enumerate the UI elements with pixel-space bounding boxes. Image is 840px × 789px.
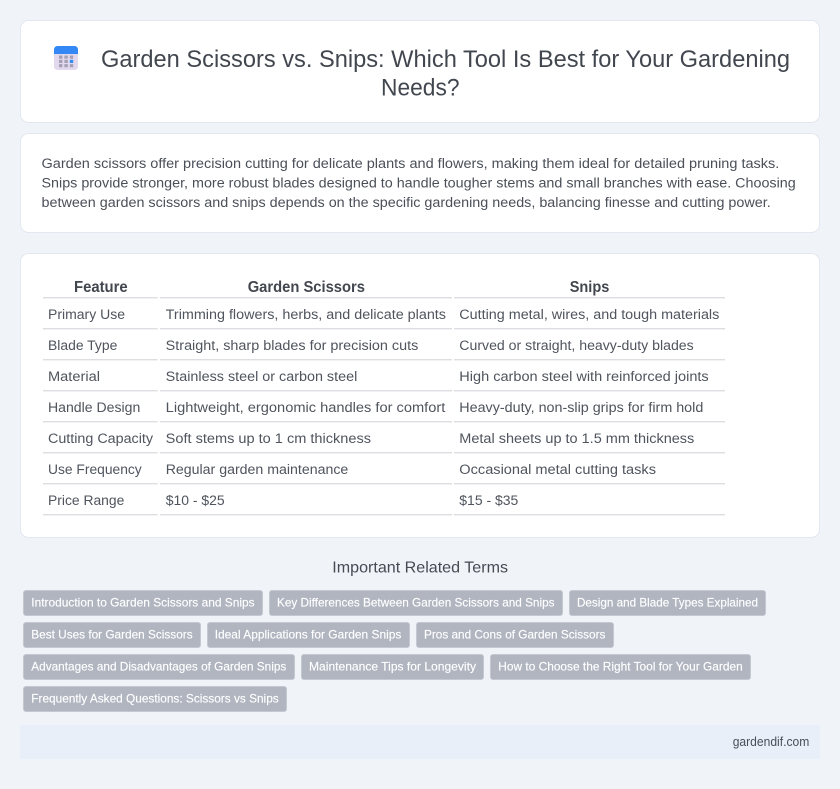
table row: use frequency: Occasional metal cutting tasks: [459, 462, 656, 478]
table row: handle design: [43, 400, 725, 422]
table row: price range: $15 - $35: [459, 493, 518, 509]
panel: comparison table: [20, 254, 820, 538]
table header row: [43, 279, 725, 298]
tag: [270, 590, 562, 616]
table row: use frequency: [43, 462, 725, 484]
panel: title header: [20, 20, 820, 122]
tag: [490, 654, 750, 680]
tag: Advantages and Disadvantages of Garden Snips: [31, 660, 286, 674]
table row: handle design: Lightweight, ergonomic handles for comfort: [166, 400, 445, 416]
table header row: Garden Scissors: [248, 279, 365, 296]
heading: important related terms: Important Related Terms: [332, 560, 508, 577]
table row: material: [43, 369, 725, 391]
table row: primary use: Primary Use: [48, 307, 125, 323]
title: [101, 46, 790, 102]
tag: [24, 686, 286, 712]
table row: handle design: Heavy-duty, non-slip grips for firm hold: [459, 400, 703, 416]
table header row: Feature: [74, 279, 128, 296]
table row: cutting capacity: Metal sheets up to 1.5 mm thickness: [459, 431, 694, 447]
tag: [208, 622, 410, 648]
footer domain text: gardendif.com: [733, 735, 809, 749]
tag: [24, 654, 294, 680]
tag: Frequently Asked Questions: Scissors vs Snips: [31, 692, 279, 706]
tag: [24, 590, 262, 616]
text block: summary: between garden scissors and snips depends on the specific gardening needs, balancing finesse and cutting power.: [42, 195, 771, 211]
table row: price range: [43, 493, 725, 515]
tag: [24, 622, 200, 648]
table row: material: Stainless steel or carbon steel: [166, 369, 357, 385]
icon: calendar: [54, 46, 78, 70]
tag: Pros and Cons of Garden Scissors: [424, 628, 605, 642]
table header row: Snips: [570, 279, 609, 296]
tag: Design and Blade Types Explained: [577, 596, 758, 610]
table row: use frequency: Use Frequency: [48, 462, 143, 478]
table row: handle design: Handle Design: [48, 400, 140, 416]
tag: Best Uses for Garden Scissors: [31, 628, 193, 642]
table row: material: Material: [48, 369, 100, 385]
text block: summary: Garden scissors offer precision cutting for delicate plants and flowers, making them ideal for detailed pruning tasks.: [42, 156, 779, 172]
title: Needs?: [381, 74, 460, 102]
tag: Maintenance Tips for Longevity: [309, 660, 476, 674]
tag: [416, 622, 614, 648]
title: Garden Scissors vs. Snips: Which Tool Is Best for Your Gardening: [101, 46, 790, 73]
panel: summary paragraph: [20, 134, 820, 232]
table row: price range: $10 - $25: [166, 493, 225, 509]
table row: cutting capacity: Cutting Capacity: [48, 431, 154, 447]
footer bar: [20, 725, 820, 759]
table row: price range: Price Range: [48, 493, 124, 509]
table row: cutting capacity: [43, 431, 725, 453]
table row: blade type: [43, 338, 725, 360]
text block: summary: [42, 156, 796, 211]
tag: Introduction to Garden Scissors and Snips: [31, 596, 255, 610]
text block: summary: Snips provide stronger, more robust blades designed to handle tougher stems and small branches with ease. Choosing: [42, 176, 796, 192]
tag: Ideal Applications for Garden Snips: [215, 628, 401, 642]
tag: Key Differences Between Garden Scissors and Snips: [277, 596, 554, 610]
table row: blade type: Straight, sharp blades for precision cuts: [166, 338, 418, 354]
tag list: related terms: [24, 590, 766, 712]
table row: primary use: [43, 307, 725, 329]
table row: primary use: Cutting metal, wires, and tough materials: [459, 307, 719, 323]
table row: primary use: Trimming flowers, herbs, and delicate plants: [166, 307, 446, 323]
table row: blade type: Curved or straight, heavy-duty blades: [459, 338, 694, 354]
tag: [302, 654, 484, 680]
table row: material: High carbon steel with reinforced joints: [459, 369, 709, 385]
tag: How to Choose the Right Tool for Your Garden: [498, 660, 743, 674]
table row: cutting capacity: Soft stems up to 1 cm thickness: [166, 431, 371, 447]
table row: use frequency: Regular garden maintenance: [166, 462, 348, 478]
table row: blade type: Blade Type: [48, 338, 117, 354]
tag: [570, 590, 766, 616]
